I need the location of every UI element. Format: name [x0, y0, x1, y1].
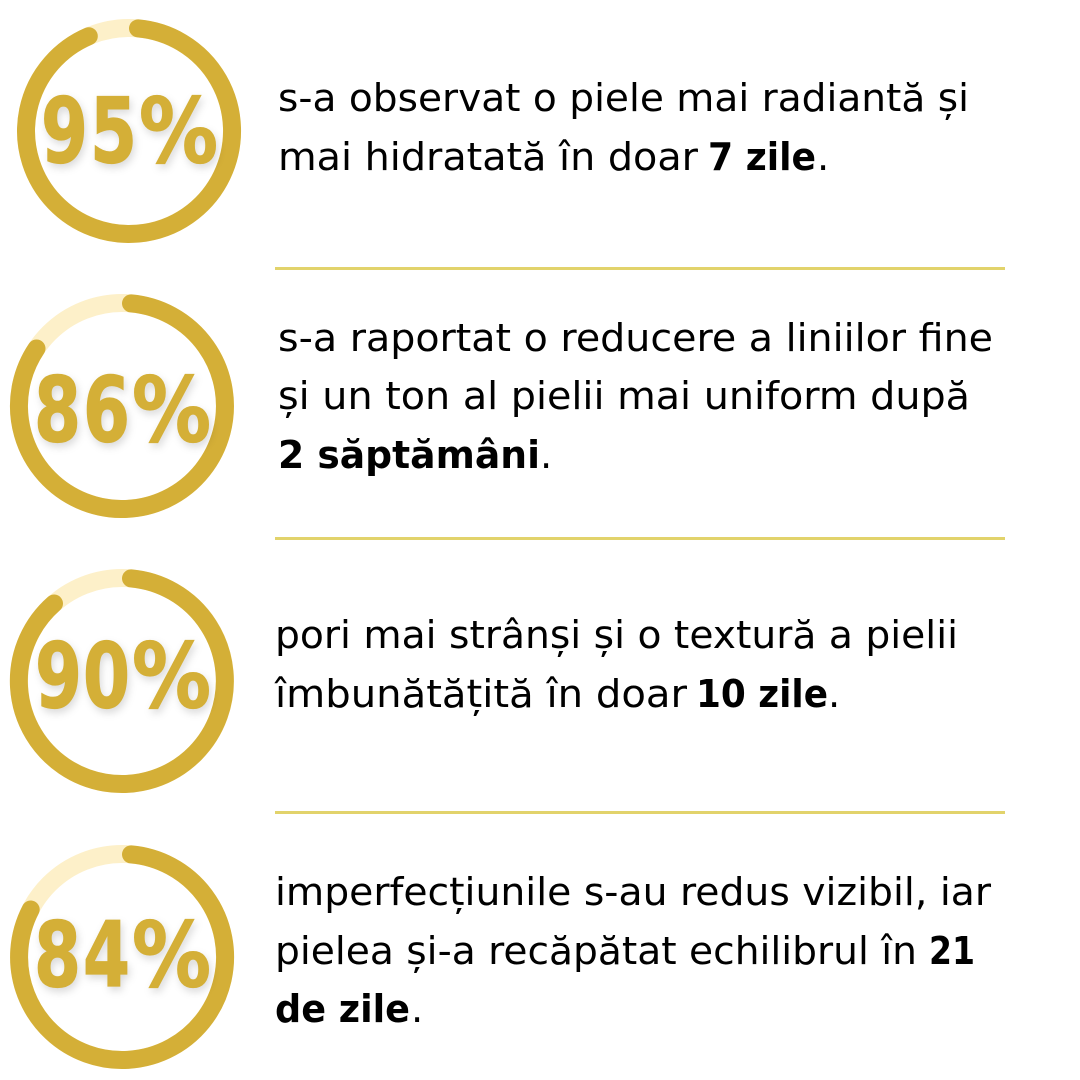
donut chart: 90%: %: [132, 624, 211, 729]
panel: 86% statistic: [19, 303, 993, 509]
donut chart: 84%: 4: [83, 903, 130, 1008]
panel: 84% statistic: [19, 854, 991, 1060]
donut chart: 90%: [19, 578, 225, 784]
text block: 86% description: [278, 316, 993, 478]
panel: 90% statistic: [19, 578, 958, 784]
text block: 84% description: .: [411, 987, 423, 1032]
text block: 90% description: [274, 613, 958, 717]
text block: 95% description: mai hidratată în doar: [278, 135, 698, 180]
text block: 90% description: .: [828, 672, 840, 717]
text block: 90% description: 10 zile: [696, 672, 828, 717]
text block: 84% description: imperfecțiunile s-au redus vizibil, iar: [275, 870, 991, 915]
text block: 84% description: 21: [929, 929, 975, 974]
donut chart: 95%: %: [139, 79, 218, 184]
text block: 95% description: s-a observat o piele mai radiantă și: [278, 76, 969, 121]
panel: 95% statistic: [26, 28, 969, 234]
text block: 86% description: s-a raportat o reducere a liniilor fine: [278, 316, 993, 361]
donut chart: 95%: 5: [90, 79, 137, 184]
text block: 95% description: 7 zile: [708, 135, 816, 180]
text block: 95% description: [278, 76, 969, 180]
text block: 95% description: .: [817, 135, 829, 180]
text block: 86% description: și un ton al pielii mai uniform după: [278, 374, 970, 419]
donut chart: 90%: 9: [35, 624, 82, 729]
text block: 86% description: .: [540, 433, 552, 478]
donut chart: 95%: 9: [41, 79, 88, 184]
donut chart: 84%: %: [132, 903, 211, 1008]
donut chart: 86%: 6: [83, 358, 130, 463]
text block: 84% description: de zile: [275, 987, 410, 1032]
text block: 86% description: 2 săptămâni: [278, 433, 540, 478]
text block: 90% description: îmbunătățită în doar: [274, 672, 687, 717]
donut chart: 95%: [26, 28, 232, 234]
donut chart: 84%: [19, 854, 225, 1060]
text block: 90% description: pori mai strânși și o textură a pielii: [275, 613, 958, 658]
donut chart: 84%: 8: [34, 903, 81, 1008]
text block: 84% description: pielea și-a recăpătat echilibrul în: [275, 929, 917, 974]
donut chart: 86%: [19, 303, 225, 509]
donut chart: 90%: 0: [83, 624, 130, 729]
donut chart: 86%: %: [132, 358, 211, 463]
donut chart: 86%: 8: [34, 358, 81, 463]
text block: 84% description: [275, 870, 991, 1032]
